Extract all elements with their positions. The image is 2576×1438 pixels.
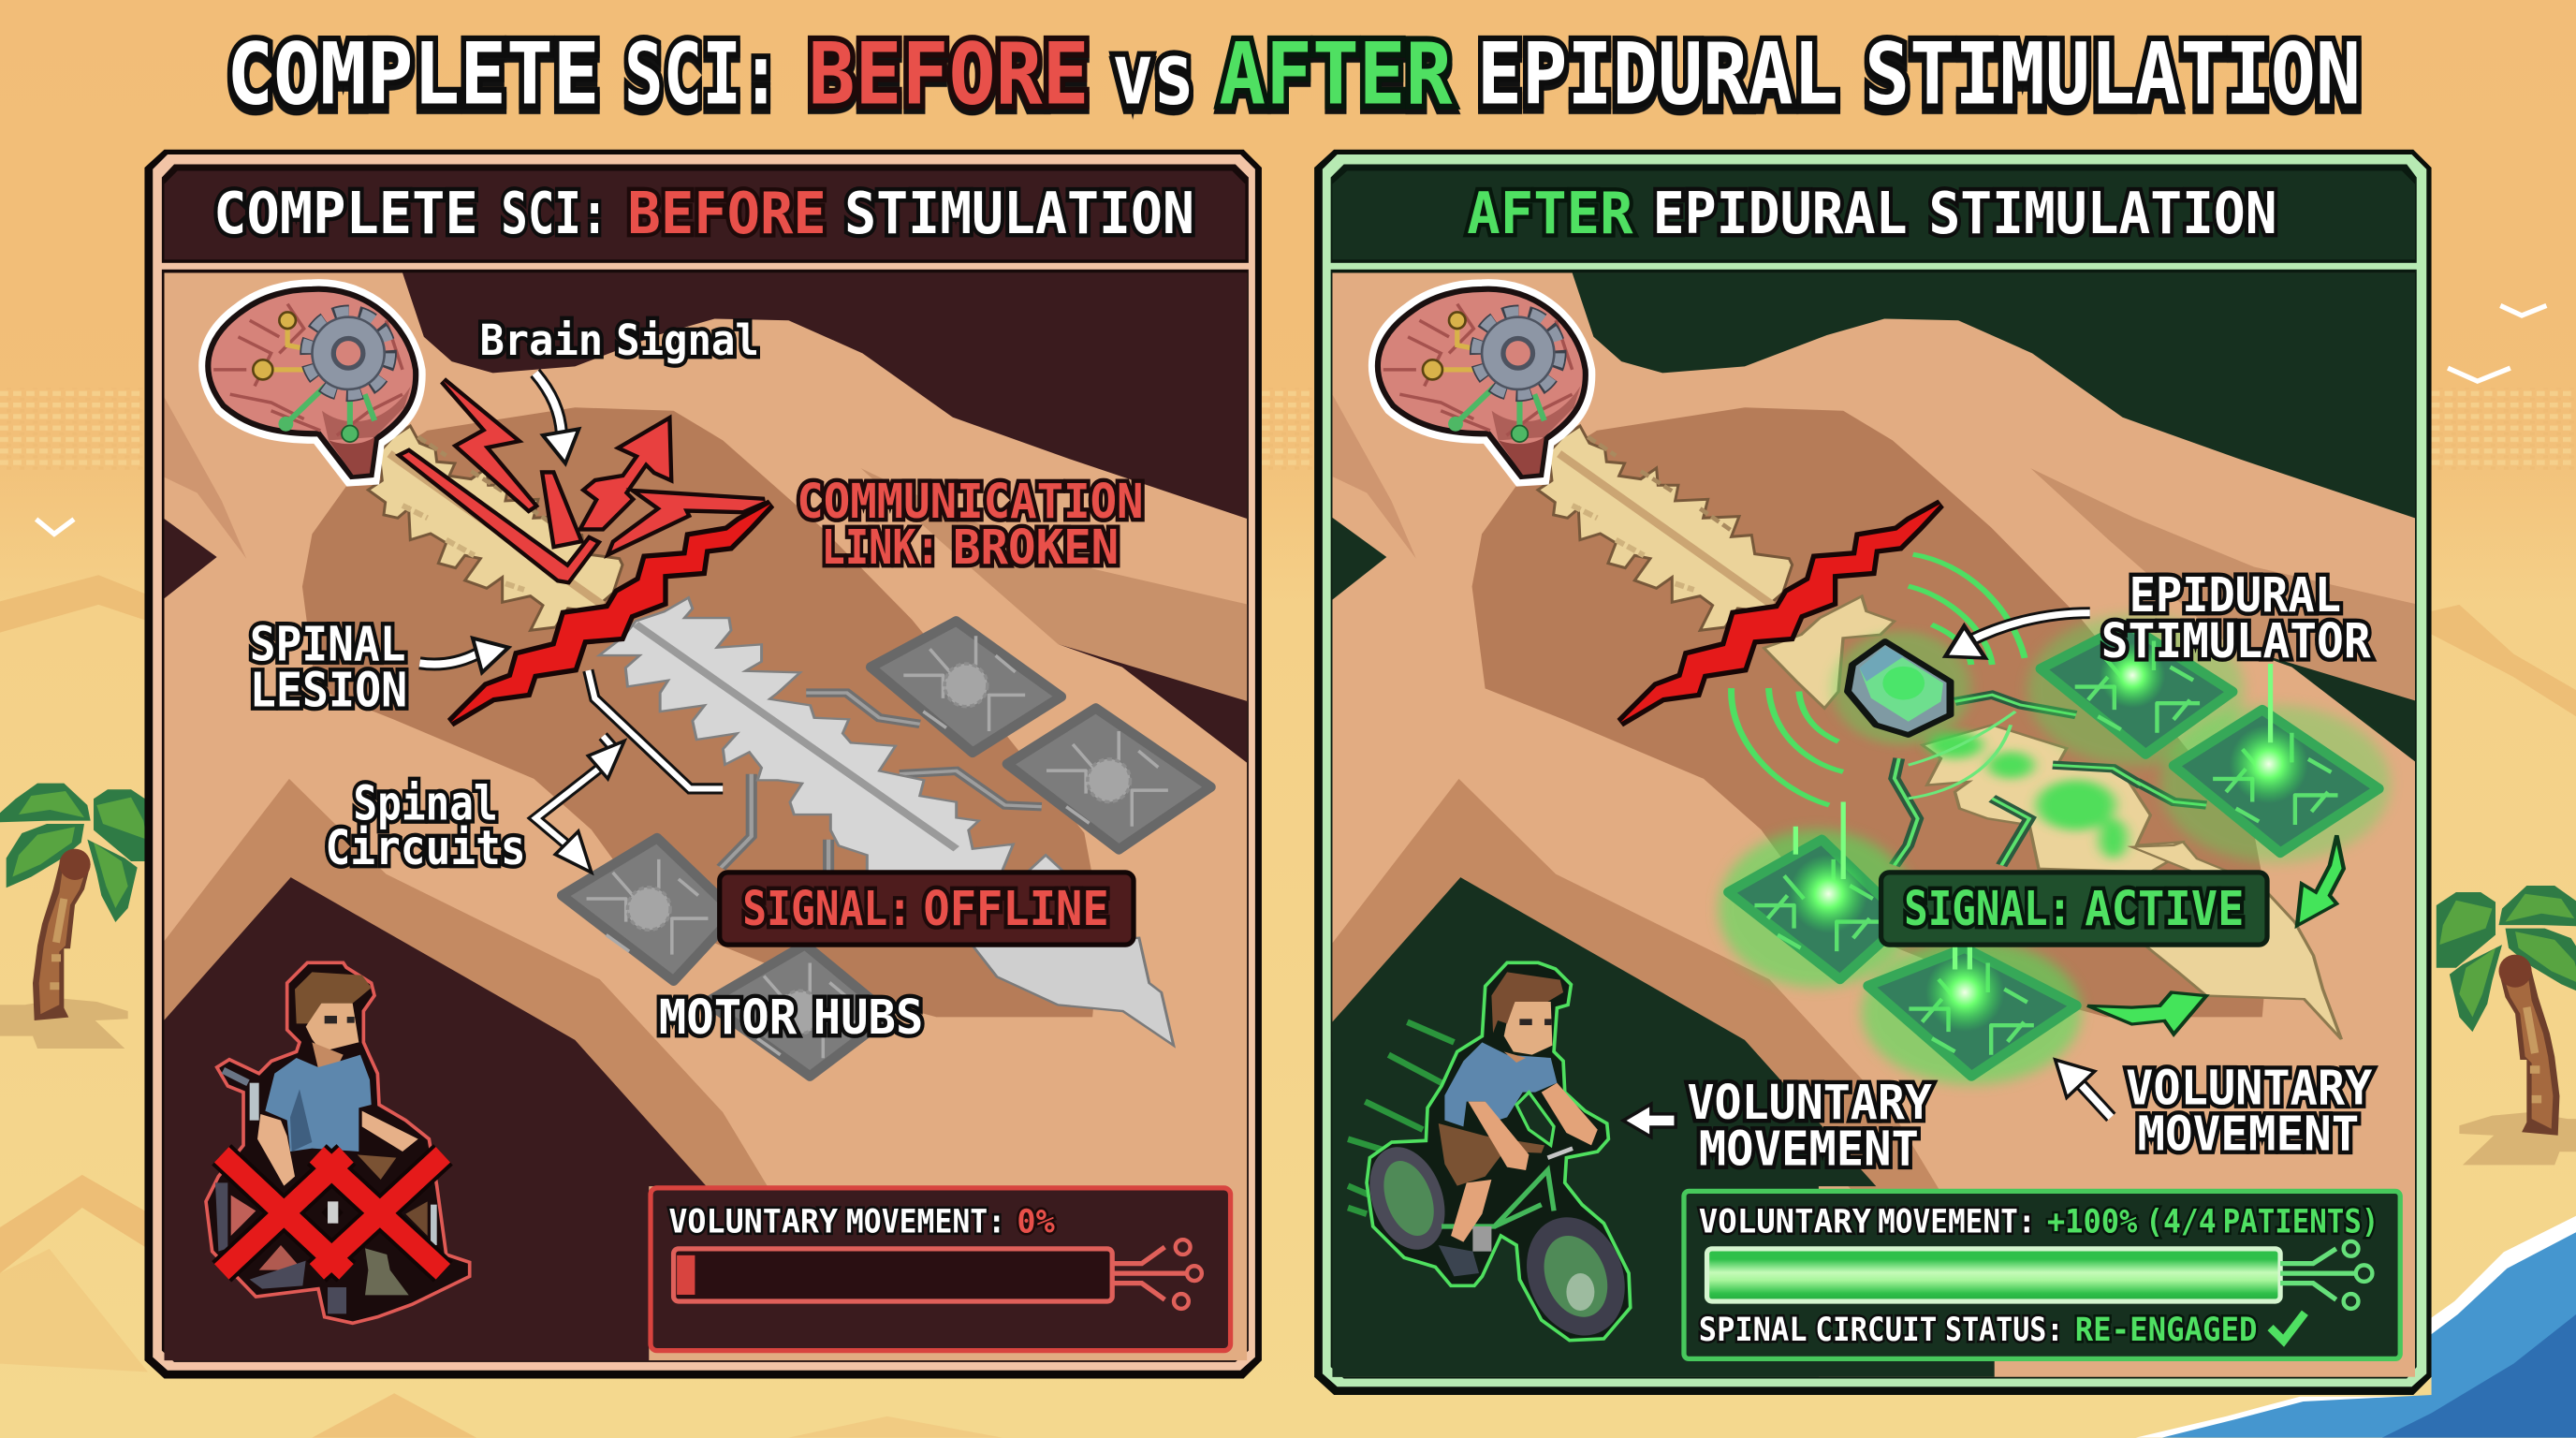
stat box: voluntary movement +100%	[1684, 1191, 2400, 1358]
stat box: voluntary movement +100%: SPINAL	[1699, 1311, 1808, 1349]
status badge: signal offline: SIGNAL:	[742, 882, 912, 937]
stat box: voluntary movement +100%: PATIENTS)	[2223, 1202, 2378, 1240]
anatomy scene: before	[163, 272, 1249, 1380]
label: voluntary movement hubs: MOVEMENT	[2137, 1108, 2359, 1163]
status badge: signal active: ACTIVE	[2085, 882, 2244, 937]
label: motor hubs: HUBS	[813, 990, 923, 1046]
panel: after stimulation	[1314, 150, 2432, 1395]
panel header: after: STIMULATION	[1928, 181, 2277, 247]
label: communication link broken: COMMUNICATION	[797, 475, 1144, 530]
label: voluntary movement hubs	[2126, 1061, 2373, 1163]
lesion	[451, 504, 770, 723]
motor hubs: offline	[562, 621, 1211, 1077]
stat box: voluntary movement +100%: RE-ENGAGED	[2075, 1311, 2258, 1349]
figure: cyclist	[1348, 962, 1642, 1350]
icon: right palm tree	[2437, 886, 2576, 1165]
lower spine: active	[1764, 596, 1895, 708]
title: COMPLETE	[227, 24, 600, 125]
title: AFTER	[1219, 24, 1453, 125]
label: voluntary movement hubs: VOLUNTARY	[2126, 1061, 2373, 1116]
birds	[37, 305, 2546, 534]
label: voluntary movement cyclist	[1687, 1076, 1932, 1177]
green arrow: hub to foot	[2297, 835, 2344, 926]
callout arrow: brain signal	[535, 373, 578, 463]
activated circuit: lower spine, wires, arcs, stimulator	[1732, 554, 2341, 1039]
stat box: voluntary movement 0%: 0%	[1017, 1202, 1055, 1240]
callout arrow: movement hubs	[2056, 1060, 2111, 1117]
motor hubs: active	[1719, 614, 2391, 1084]
callout arrow: spinal lesion	[419, 638, 508, 672]
label: epidural stimulator: STIMULATOR	[2101, 614, 2371, 669]
label: spinal circuits: Spinal	[353, 777, 498, 832]
broken signal arrows	[402, 381, 765, 580]
figure: person in wheelchair	[206, 962, 470, 1323]
upper spine	[1538, 426, 1793, 630]
label: spinal circuits: Circuits	[326, 821, 526, 876]
label: communication link broken	[797, 475, 1144, 576]
panel header: after	[1327, 171, 2422, 270]
label: voluntary movement cyclist: MOVEMENT	[1699, 1122, 1919, 1177]
label: epidural stimulator	[2101, 568, 2371, 669]
callout bracket: spinal circuits	[535, 670, 723, 873]
title: STIMULATION	[1865, 24, 2361, 125]
label: communication link broken: LINK:	[822, 521, 940, 576]
label: brain signal: Signal	[616, 315, 759, 365]
label: brain signal: Brain	[479, 315, 603, 365]
status badge: signal active	[1881, 873, 2267, 945]
stat box: voluntary movement 0%: MOVEMENT:	[846, 1202, 1005, 1240]
label: spinal lesion	[250, 618, 407, 719]
status badge: signal active: SIGNAL:	[1904, 882, 2071, 937]
panel header: before: BEFORE	[627, 181, 827, 247]
sacrum: active	[2141, 892, 2341, 1039]
panel header: after: AFTER	[1467, 181, 1633, 247]
panel header: before	[157, 171, 1251, 270]
callout arrow: stimulator	[1946, 613, 2090, 658]
label: communication link broken: BROKEN	[953, 521, 1119, 576]
panel header: after: EPIDURAL	[1653, 181, 1908, 247]
stat box: voluntary movement +100%: CIRCUIT	[1815, 1311, 1937, 1349]
sea	[2136, 1216, 2576, 1438]
title	[227, 24, 2361, 125]
stat box: voluntary movement +100%: STATUS:	[1945, 1311, 2063, 1349]
icon: epidural stimulator	[1832, 613, 2344, 1034]
stat box: voluntary movement 0%: VOLUNTARY	[668, 1202, 838, 1240]
label: voluntary movement cyclist: VOLUNTARY	[1687, 1076, 1932, 1131]
label: brain signal	[479, 315, 759, 365]
panel header: before: STIMULATION	[844, 181, 1194, 247]
green arrow: hub to foot lower	[2087, 992, 2206, 1034]
title: SCI:	[624, 24, 781, 125]
label: spinal lesion: SPINAL	[250, 618, 406, 673]
label: spinal lesion: LESION	[250, 664, 407, 719]
title: EPIDURAL	[1477, 24, 1838, 125]
label: motor hubs: MOTOR	[659, 990, 798, 1046]
panel: before stimulation	[144, 150, 1262, 1380]
anatomy scene: after	[1332, 272, 2419, 1380]
stat box: voluntary movement +100%: +100%	[2047, 1202, 2137, 1240]
label: motor hubs	[659, 990, 923, 1046]
icon: left palm tree	[0, 784, 150, 1049]
status badge: signal offline: OFFLINE	[923, 882, 1109, 937]
label: epidural stimulator: EPIDURAL	[2130, 568, 2341, 624]
stat box: voluntary movement +100%: (4/4	[2145, 1202, 2217, 1240]
lower spine and wires: offline	[599, 597, 1174, 1046]
stat box: voluntary movement +100%: MOVEMENT:	[1878, 1202, 2036, 1240]
upper spine	[368, 426, 622, 630]
callout arrow: cyclist	[1623, 1104, 1676, 1137]
lesion	[1620, 504, 1940, 723]
panel header: before: COMPLETE	[213, 181, 478, 247]
icon: check mark	[2271, 1313, 2305, 1341]
dunes	[0, 575, 2576, 1438]
status badge: signal offline	[720, 873, 1134, 945]
title: vs	[1112, 24, 1194, 125]
icon: brain after	[1371, 283, 1592, 483]
signal arcs	[1732, 554, 2025, 805]
sacrum: offline	[973, 938, 1174, 1046]
panel header: before: SCI:	[501, 181, 607, 247]
icon: brain before	[202, 283, 422, 483]
icon: red crosses	[222, 1154, 443, 1271]
stat box: voluntary movement 0%	[651, 1188, 1231, 1351]
label: spinal circuits	[326, 777, 526, 876]
stat box: voluntary movement +100%: VOLUNTARY	[1699, 1202, 1871, 1240]
title: BEFORE	[809, 24, 1090, 125]
